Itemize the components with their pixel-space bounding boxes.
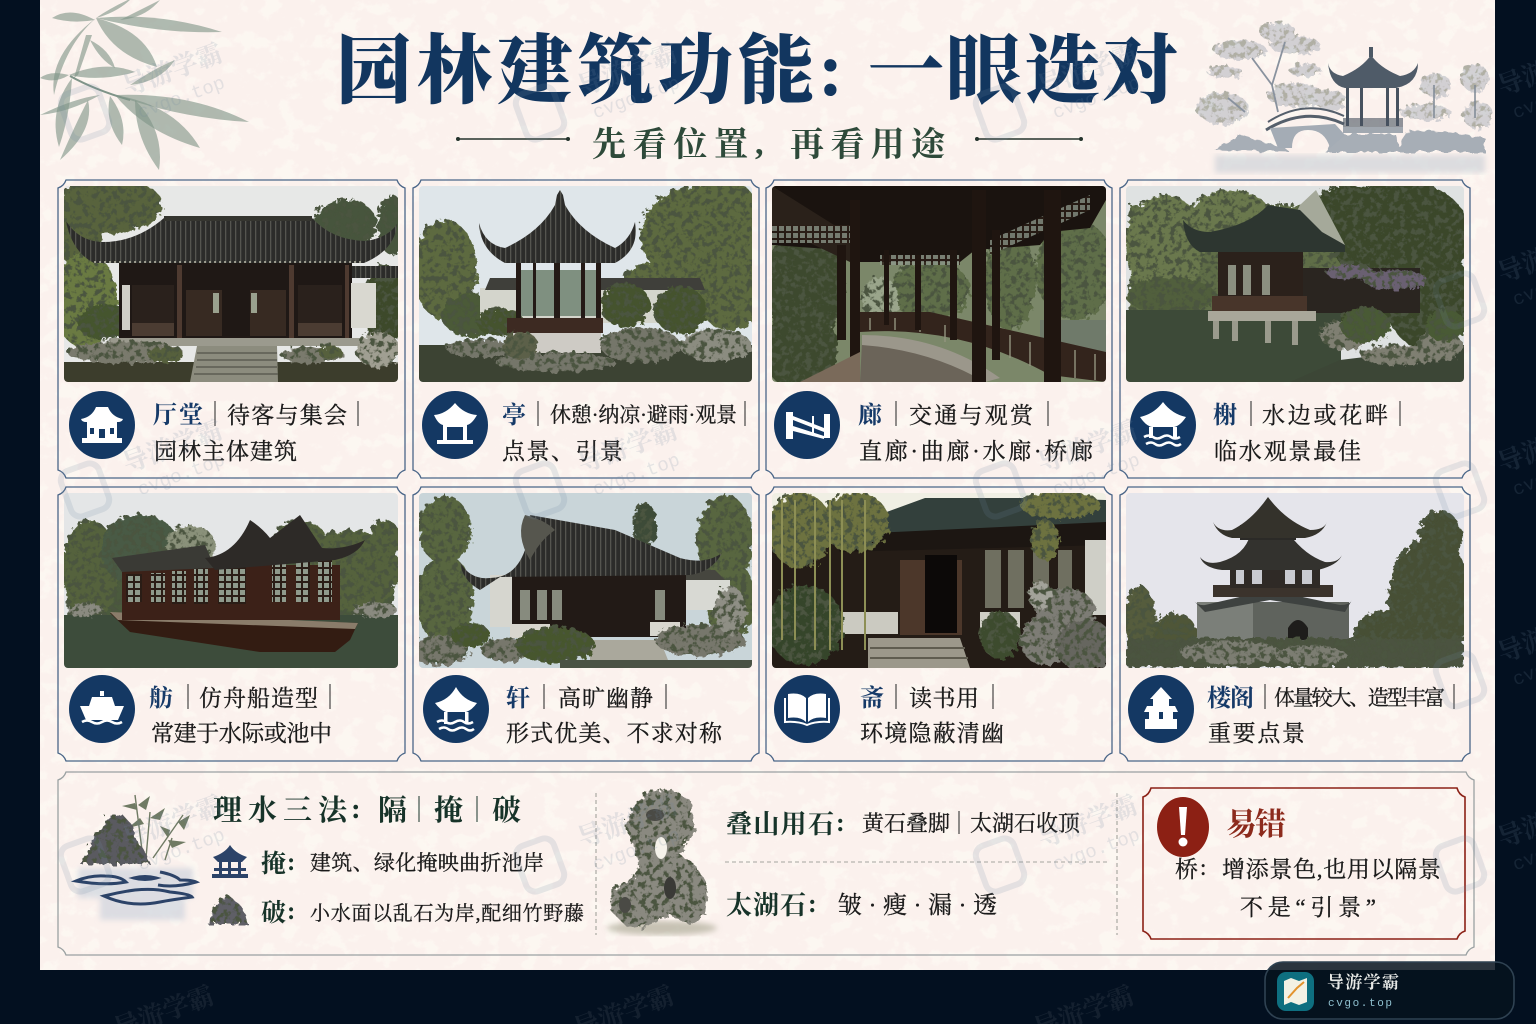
text: 太湖石: : xyxy=(808,889,817,918)
card text: 读书用 xyxy=(909,686,979,711)
logo badge: 导游学霸 xyxy=(1327,973,1399,992)
card text: 高旷幽静 xyxy=(558,686,653,711)
watermarks: 导游学霸 xyxy=(1034,39,1141,101)
text: 破: 破 xyxy=(261,899,286,927)
card text: 环境隐蔽清幽 xyxy=(860,721,1004,746)
photo: water pavilion xyxy=(1125,180,1475,382)
callout: 易错: 不是“引景” xyxy=(1240,895,1376,920)
callout: 易错: 桥 xyxy=(1175,857,1198,882)
illustration: bamboo leaves xyxy=(40,0,249,170)
watermarks: 导游学霸 xyxy=(119,39,226,101)
title: 园林建筑功能 xyxy=(336,30,814,114)
logo badge xyxy=(1265,962,1514,1019)
heading xyxy=(213,793,521,827)
icon: warning xyxy=(1157,797,1209,857)
text: 太湖石: 太湖石 xyxy=(726,891,806,920)
illustration: ink landscape with pavilion and bridge xyxy=(1196,22,1493,173)
card text: 仿舟船造型 xyxy=(199,686,318,711)
text: 叠山用石: 叠山用石 xyxy=(726,810,834,839)
text: 叠山用石: : xyxy=(836,808,845,837)
panel: bottom methods xyxy=(58,772,1474,955)
icon: water pavilion xyxy=(1130,391,1196,459)
card: 轩 xyxy=(410,487,759,761)
card text: 斋 xyxy=(860,684,884,712)
text: 掩: 建筑、绿化掩映曲折池岸 xyxy=(310,851,544,875)
subtitle: 先看位置 xyxy=(592,126,748,164)
card text: 临水观景最佳 xyxy=(1214,439,1361,464)
callout: 易错: 增添景色,也用以隔景 xyxy=(1222,857,1441,882)
card text: 形式优美、不求对称 xyxy=(506,721,723,746)
icon: boat xyxy=(69,675,135,743)
heading: : xyxy=(351,793,361,825)
text: 掩: 掩 xyxy=(261,850,286,878)
watermarks: 导游学霸 xyxy=(574,39,681,101)
icon: small pavilion xyxy=(212,845,248,878)
card: 廊 xyxy=(762,180,1115,478)
watermarks: cvgo.top xyxy=(590,72,683,124)
card text: 点景、引景 xyxy=(502,439,623,464)
callout: 易错: 易错 xyxy=(1226,807,1286,842)
title: : xyxy=(818,28,843,112)
watermarks: cvgo.top xyxy=(590,824,683,876)
watermarks: cvgo.top xyxy=(1050,824,1143,876)
card: 榭 xyxy=(1120,180,1475,478)
card text: 直廊·曲廊·水廊·桥廊 xyxy=(859,439,1093,464)
card text: 交通与观赏 xyxy=(909,403,1034,428)
watermarks: cvgo.top xyxy=(590,449,683,501)
card text: 亭 xyxy=(502,401,526,429)
card text xyxy=(1207,684,1454,746)
photo: corridor xyxy=(762,186,1115,390)
heading: 理水三法 xyxy=(213,794,349,827)
card text xyxy=(1213,401,1400,464)
card: 楼阁 xyxy=(1120,487,1472,761)
illustration: rocks, bamboo and water xyxy=(76,795,196,920)
watermarks: 导游学霸 xyxy=(1034,791,1141,853)
watermarks: 导游学霸 xyxy=(119,791,226,853)
subtitle xyxy=(456,125,1083,164)
logo badge: cvgo.top xyxy=(1328,998,1392,1010)
text: 破: 小水面以乱石为岸,配细竹野藤 xyxy=(310,902,584,925)
card text: 廊 xyxy=(858,401,882,429)
card: 亭 xyxy=(413,180,765,478)
watermarks: 导游学霸 xyxy=(1034,416,1141,478)
icon: pavilion xyxy=(422,391,488,459)
callout: 易错: : xyxy=(1200,855,1206,880)
photo: tower xyxy=(1124,493,1472,668)
icon: map xyxy=(1277,972,1314,1011)
card: 斋 xyxy=(766,487,1115,761)
watermarks: 导游学霸 xyxy=(119,416,226,478)
text: 叠山用石: 黄石叠脚 xyxy=(862,811,950,836)
title xyxy=(336,28,1178,114)
card text: 厅堂 xyxy=(153,402,203,429)
heading: 隔 xyxy=(378,794,407,827)
text: 太湖石: 皱·瘦·漏·透 xyxy=(838,892,997,919)
icon: pavilion over water xyxy=(423,675,489,743)
watermarks: 导游学霸 xyxy=(574,416,681,478)
card text xyxy=(153,401,358,464)
card text: 榭 xyxy=(1213,402,1237,429)
watermarks: cvgo.top xyxy=(1050,72,1143,124)
subtitle: 再看用途 xyxy=(790,126,946,164)
card text xyxy=(502,401,745,464)
icon: hall xyxy=(69,391,135,459)
card text xyxy=(858,401,1093,464)
card text xyxy=(860,684,1004,746)
text: 叠山用石: 太湖石收顶 xyxy=(970,811,1081,836)
photo: hall xyxy=(53,177,407,382)
text: 掩: : xyxy=(287,849,295,876)
card text: 园林主体建筑 xyxy=(154,439,297,464)
card text: 体量较大、造型丰富 xyxy=(1274,686,1445,710)
watermarks: cvgo.top xyxy=(135,824,228,876)
text: 太湖石 xyxy=(726,889,997,920)
watermarks: cvgo.top xyxy=(1050,449,1143,501)
card text: 轩 xyxy=(506,685,530,712)
watermarks: cvgo.top xyxy=(135,449,228,501)
illustration: taihu stone xyxy=(607,790,717,935)
callout: 易错 xyxy=(1143,788,1465,939)
icon: pagoda xyxy=(1128,675,1194,743)
text: 破 xyxy=(261,898,584,927)
text: 破: : xyxy=(287,898,295,925)
icon: small rock xyxy=(207,895,249,924)
photo: boat xyxy=(62,493,401,668)
heading: 破 xyxy=(492,794,521,827)
card: 厅堂 xyxy=(53,177,407,478)
text: 叠山用石 xyxy=(726,808,1081,839)
watermarks: 导游学霸 xyxy=(574,791,681,853)
card text: 待客与集会 xyxy=(227,403,347,428)
heading: 掩 xyxy=(434,794,463,827)
watermarks: cvgo.top xyxy=(135,72,228,124)
text: 掩 xyxy=(261,849,544,878)
title: 一眼选对 xyxy=(868,30,1178,114)
icon: corridor xyxy=(774,391,840,459)
card text: 休憩·纳凉·避雨·观景 xyxy=(550,403,737,427)
subtitle: , xyxy=(755,125,764,162)
photo: study xyxy=(767,491,1115,671)
card text: 舫 xyxy=(149,685,173,712)
card text: 楼阁 xyxy=(1207,685,1254,712)
card text xyxy=(506,684,723,746)
water reflections xyxy=(1215,155,1485,173)
photo: pavilion xyxy=(413,180,765,382)
card text: 常建于水际或池中 xyxy=(151,721,332,746)
card text: 重要点景 xyxy=(1208,721,1305,746)
icon: book xyxy=(774,675,840,743)
card: 舫 xyxy=(58,487,405,761)
card text xyxy=(149,684,332,746)
card text: 水边或花畔 xyxy=(1262,403,1388,428)
photo: pavilion hall xyxy=(410,493,755,668)
